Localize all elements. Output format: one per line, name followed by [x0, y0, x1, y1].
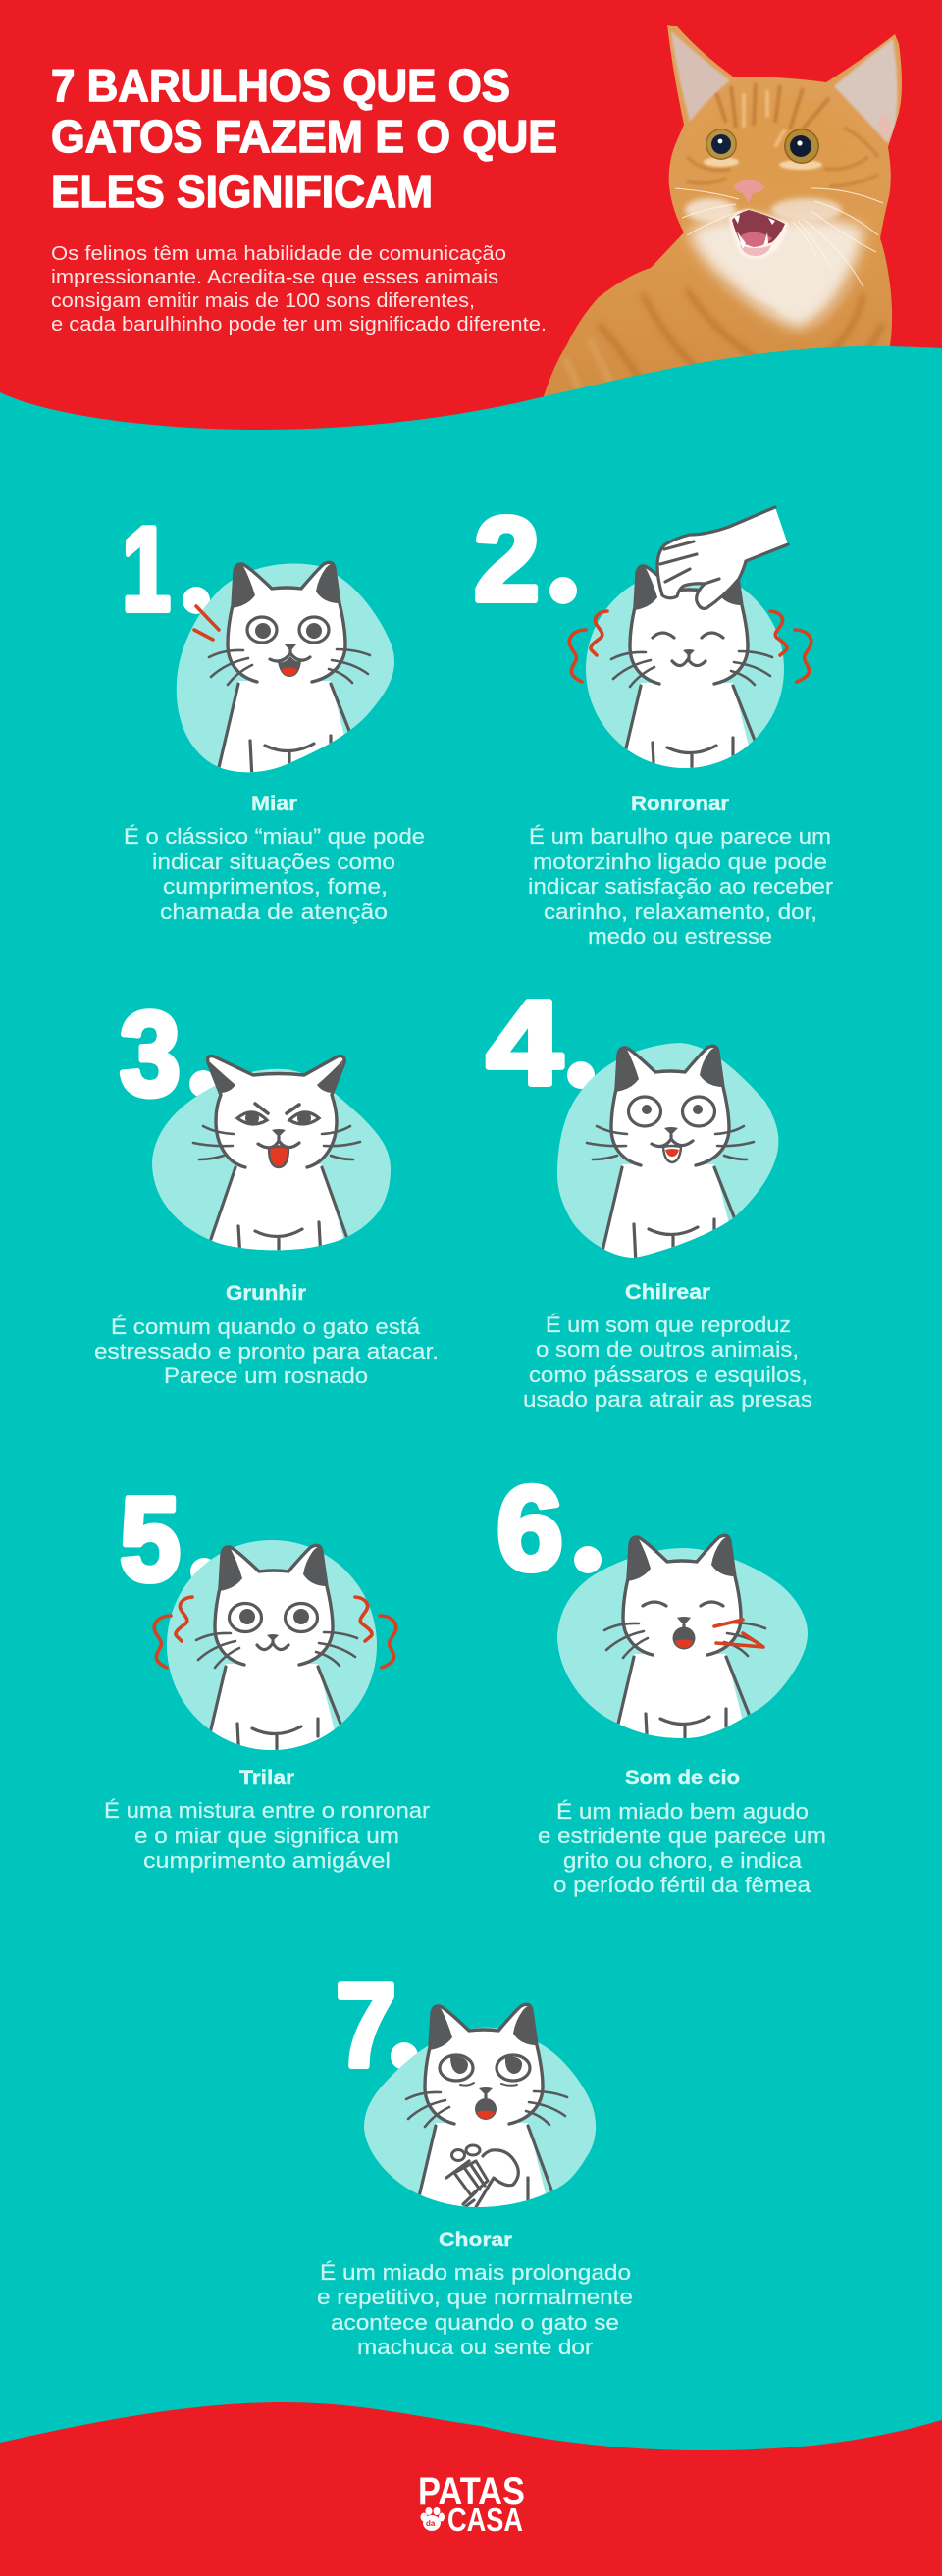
- text chilrear: usado para atrair as presas: [523, 1387, 812, 1412]
- number 6: .: [571, 1460, 604, 1593]
- logo: patas da casa: PATAS: [418, 2470, 525, 2513]
- intro text: impressionante. Acredita-se que esses animais: [51, 267, 498, 288]
- text grunhir: [94, 1314, 439, 1388]
- text miar: [124, 824, 425, 924]
- text som de cio: o período fértil da fêmea: [553, 1873, 811, 1897]
- title: 7 BARULHOS QUE OS: [51, 60, 510, 111]
- text miar: indicar situações como: [152, 850, 395, 874]
- logo: patas da casa: CASA: [447, 2501, 523, 2538]
- text grunhir: Parece um rosnado: [164, 1364, 368, 1388]
- blob 2: [586, 570, 784, 768]
- heading ronronar: Ronronar: [631, 793, 729, 815]
- blob 6: [557, 1548, 808, 1738]
- intro text: e cada barulhinho pode ter um significado diferente.: [51, 314, 547, 335]
- text som de cio: grito ou choro, e indica: [563, 1848, 803, 1873]
- number 4: [487, 975, 598, 1109]
- blob 3: [152, 1069, 391, 1250]
- photo: orange tabby cat meowing: [544, 25, 902, 396]
- number 7: 7: [336, 1958, 396, 2091]
- number 4: .: [564, 975, 598, 1108]
- panel: item 3 grunhir: [94, 984, 439, 1388]
- text ronronar: carinho, relaxamento, dor,: [544, 900, 817, 924]
- heading som de cio: Som de cio: [625, 1767, 740, 1789]
- number 2: [474, 490, 580, 626]
- number 5: .: [187, 1471, 221, 1605]
- blob 7: [364, 2028, 596, 2207]
- text chorar: É um miado mais prolongado: [320, 2260, 631, 2285]
- number 6: 6: [497, 1462, 563, 1595]
- heading trilar: Trilar: [239, 1767, 294, 1789]
- text chorar: [317, 2260, 633, 2359]
- number 3: 3: [120, 987, 181, 1120]
- purring vibration marks: [569, 611, 811, 682]
- text trilar: e o miar que significa um: [134, 1824, 399, 1848]
- number 3: .: [186, 984, 220, 1117]
- text chilrear: [523, 1313, 812, 1412]
- text miar: cumprimentos, fome,: [163, 874, 388, 899]
- text som de cio: É um miado bem agudo: [556, 1799, 809, 1824]
- cat 5 illustration: [154, 1545, 396, 1763]
- text ronronar: medo ou estresse: [588, 924, 772, 949]
- cat 1 illustration: [194, 562, 370, 780]
- blob 5: [167, 1540, 377, 1750]
- number 4: 4: [487, 976, 562, 1109]
- number 7: .: [388, 1956, 421, 2089]
- sound marks: [194, 606, 219, 640]
- panel: item 2 ronronar: [474, 490, 833, 949]
- blob 1: [177, 564, 394, 772]
- title: ELES SIGNIFICAM: [51, 166, 433, 217]
- number 6: [497, 1460, 604, 1595]
- text miar: É o clássico “miau” que pode: [124, 824, 425, 849]
- number 1: 1: [122, 502, 171, 636]
- text som de cio: [538, 1799, 826, 1897]
- text ronronar: É um barulho que parece um: [529, 824, 831, 849]
- text ronronar: [528, 824, 833, 949]
- text chorar: acontece quando o gato se: [331, 2310, 619, 2335]
- text ronronar: indicar satisfação ao receber: [528, 874, 833, 899]
- blob 4: [557, 1043, 778, 1258]
- number 2: 2: [474, 492, 540, 626]
- number 5: 5: [120, 1472, 181, 1606]
- cat 6 illustration: [604, 1535, 765, 1753]
- number 2: .: [547, 490, 580, 624]
- text miar: chamada de atenção: [160, 900, 388, 924]
- heading chilrear: Chilrear: [625, 1281, 710, 1304]
- heading miar: Miar: [251, 793, 297, 815]
- heading grunhir: Grunhir: [226, 1282, 306, 1305]
- cat 7 illustration: [406, 2004, 567, 2222]
- text trilar: cumprimento amigável: [143, 1848, 391, 1873]
- title: [51, 60, 557, 217]
- cat 2 illustration: [569, 507, 811, 782]
- loud cry marks: [714, 1620, 763, 1647]
- number 5: [120, 1471, 221, 1606]
- title: GATOS FAZEM E O QUE: [51, 111, 557, 162]
- logo: patas da casa: [418, 2470, 525, 2538]
- text trilar: [104, 1798, 430, 1873]
- panel: item 1 miar: [122, 500, 425, 924]
- text grunhir: É comum quando o gato está: [111, 1314, 421, 1339]
- panel: item 5 trilar: [104, 1471, 430, 1873]
- panel: item 7 chorar: [317, 1956, 633, 2359]
- cat 3 illustration: [193, 1056, 360, 1259]
- intro text: Os felinos têm uma habilidade de comunicação: [51, 243, 506, 265]
- text ronronar: motorzinho ligado que pode: [533, 850, 827, 874]
- panel: item 6 som de cio: [497, 1460, 826, 1897]
- heading chorar: Chorar: [439, 2229, 512, 2251]
- number 1: .: [180, 500, 213, 634]
- cat 4 illustration: [587, 1046, 754, 1263]
- icon: hand petting: [657, 507, 788, 608]
- panel: item 4 chilrear: [487, 975, 812, 1412]
- text trilar: É uma mistura entre o ronronar: [104, 1798, 430, 1823]
- text som de cio: e estridente que parece um: [538, 1824, 826, 1848]
- text chilrear: o som de outros animais,: [536, 1337, 799, 1362]
- intro text: consigam emitir mais de 100 sons diferentes,: [51, 290, 475, 312]
- trill vibration marks: [154, 1597, 396, 1668]
- text chilrear: como pássaros e esquilos,: [529, 1363, 808, 1387]
- icon: paw: da: [426, 2519, 436, 2528]
- intro text: [51, 243, 547, 335]
- number 3: [120, 984, 220, 1120]
- text grunhir: estressado e pronto para atacar.: [94, 1339, 439, 1364]
- text chorar: e repetitivo, que normalmente: [317, 2285, 633, 2309]
- text chorar: machuca ou sente dor: [357, 2335, 593, 2359]
- text chilrear: É um som que reproduz: [546, 1313, 791, 1337]
